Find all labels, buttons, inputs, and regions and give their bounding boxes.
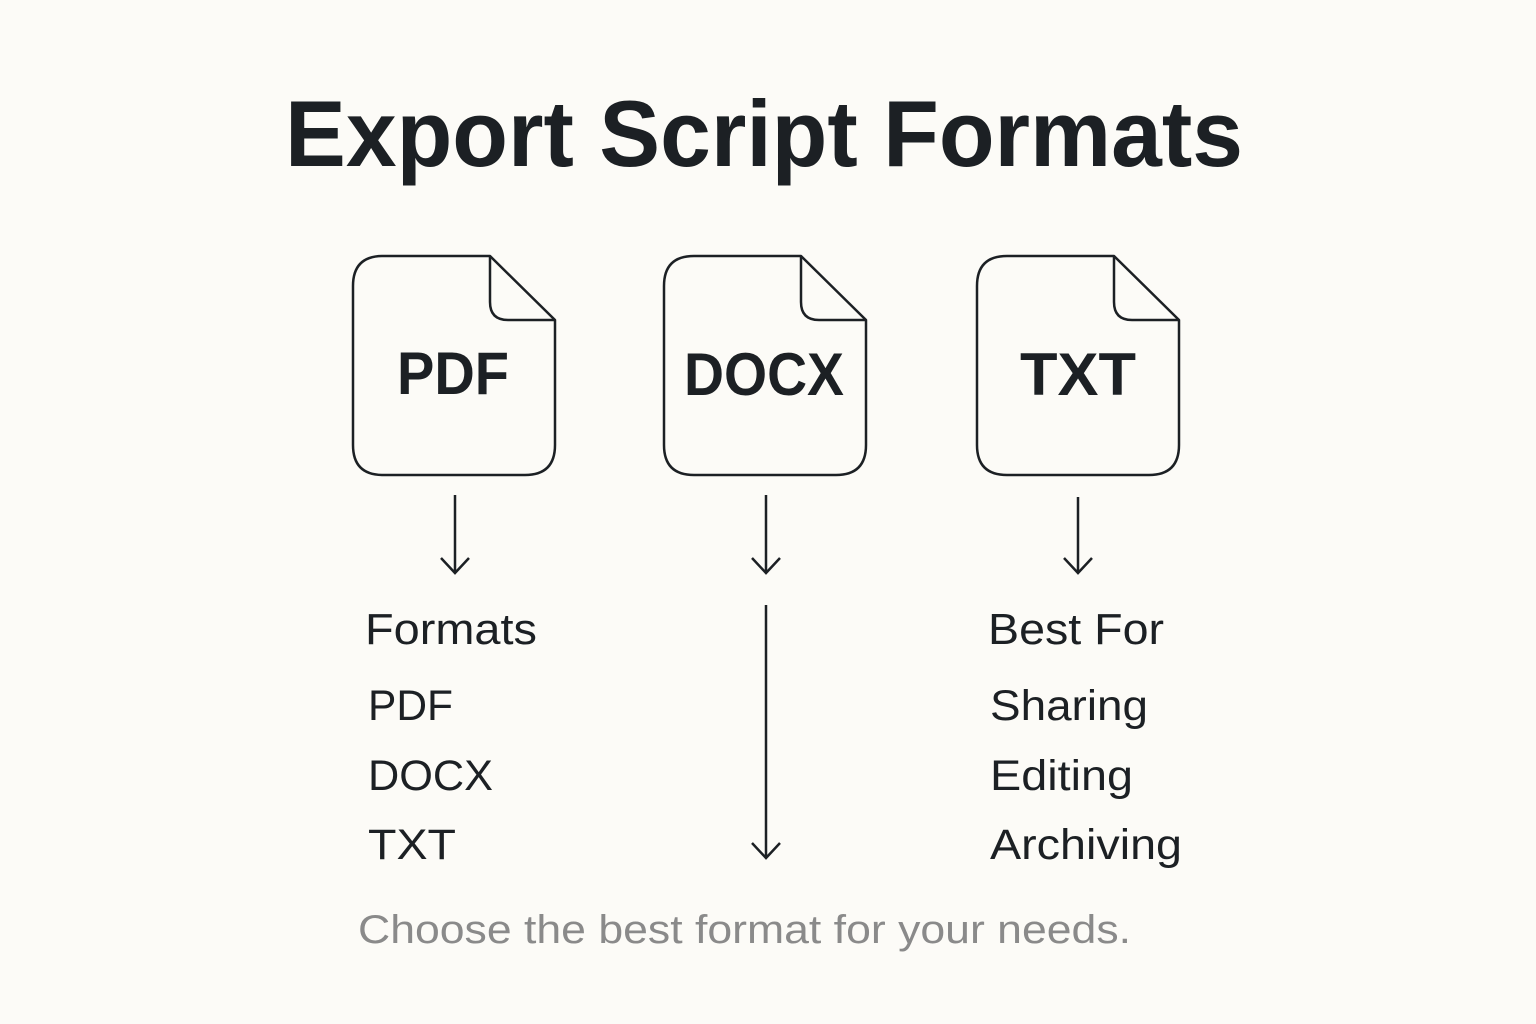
arrow: long center: [752, 605, 780, 858]
text block: formats list: [365, 605, 537, 869]
text block: formats list: TXT: [368, 821, 456, 869]
text block: best for list: Sharing: [990, 682, 1148, 730]
text block: formats list: PDF: [368, 682, 453, 730]
icon: DOCX document: [664, 256, 866, 475]
footer note: Choose the best format for your needs.: [358, 908, 1131, 952]
text block: formats list: Formats: [365, 605, 537, 654]
icon: DOCX document: DOCX: [684, 341, 844, 408]
icon: TXT document: TXT: [1020, 341, 1136, 408]
text block: best for list: Editing: [990, 752, 1133, 800]
text block: best for list: [988, 605, 1182, 869]
arrow: DOCX down: [752, 495, 780, 573]
text block: formats list: DOCX: [368, 752, 493, 800]
text block: best for list: Best For: [988, 605, 1164, 654]
icon: TXT document: [977, 256, 1179, 475]
title: Export Script Formats: [285, 81, 1243, 186]
arrow: TXT down: [1064, 497, 1092, 573]
icon: PDF document: [353, 256, 555, 475]
arrow: PDF down: [441, 495, 469, 573]
icon: PDF document: PDF: [397, 340, 509, 407]
text block: best for list: Archiving: [990, 821, 1182, 869]
